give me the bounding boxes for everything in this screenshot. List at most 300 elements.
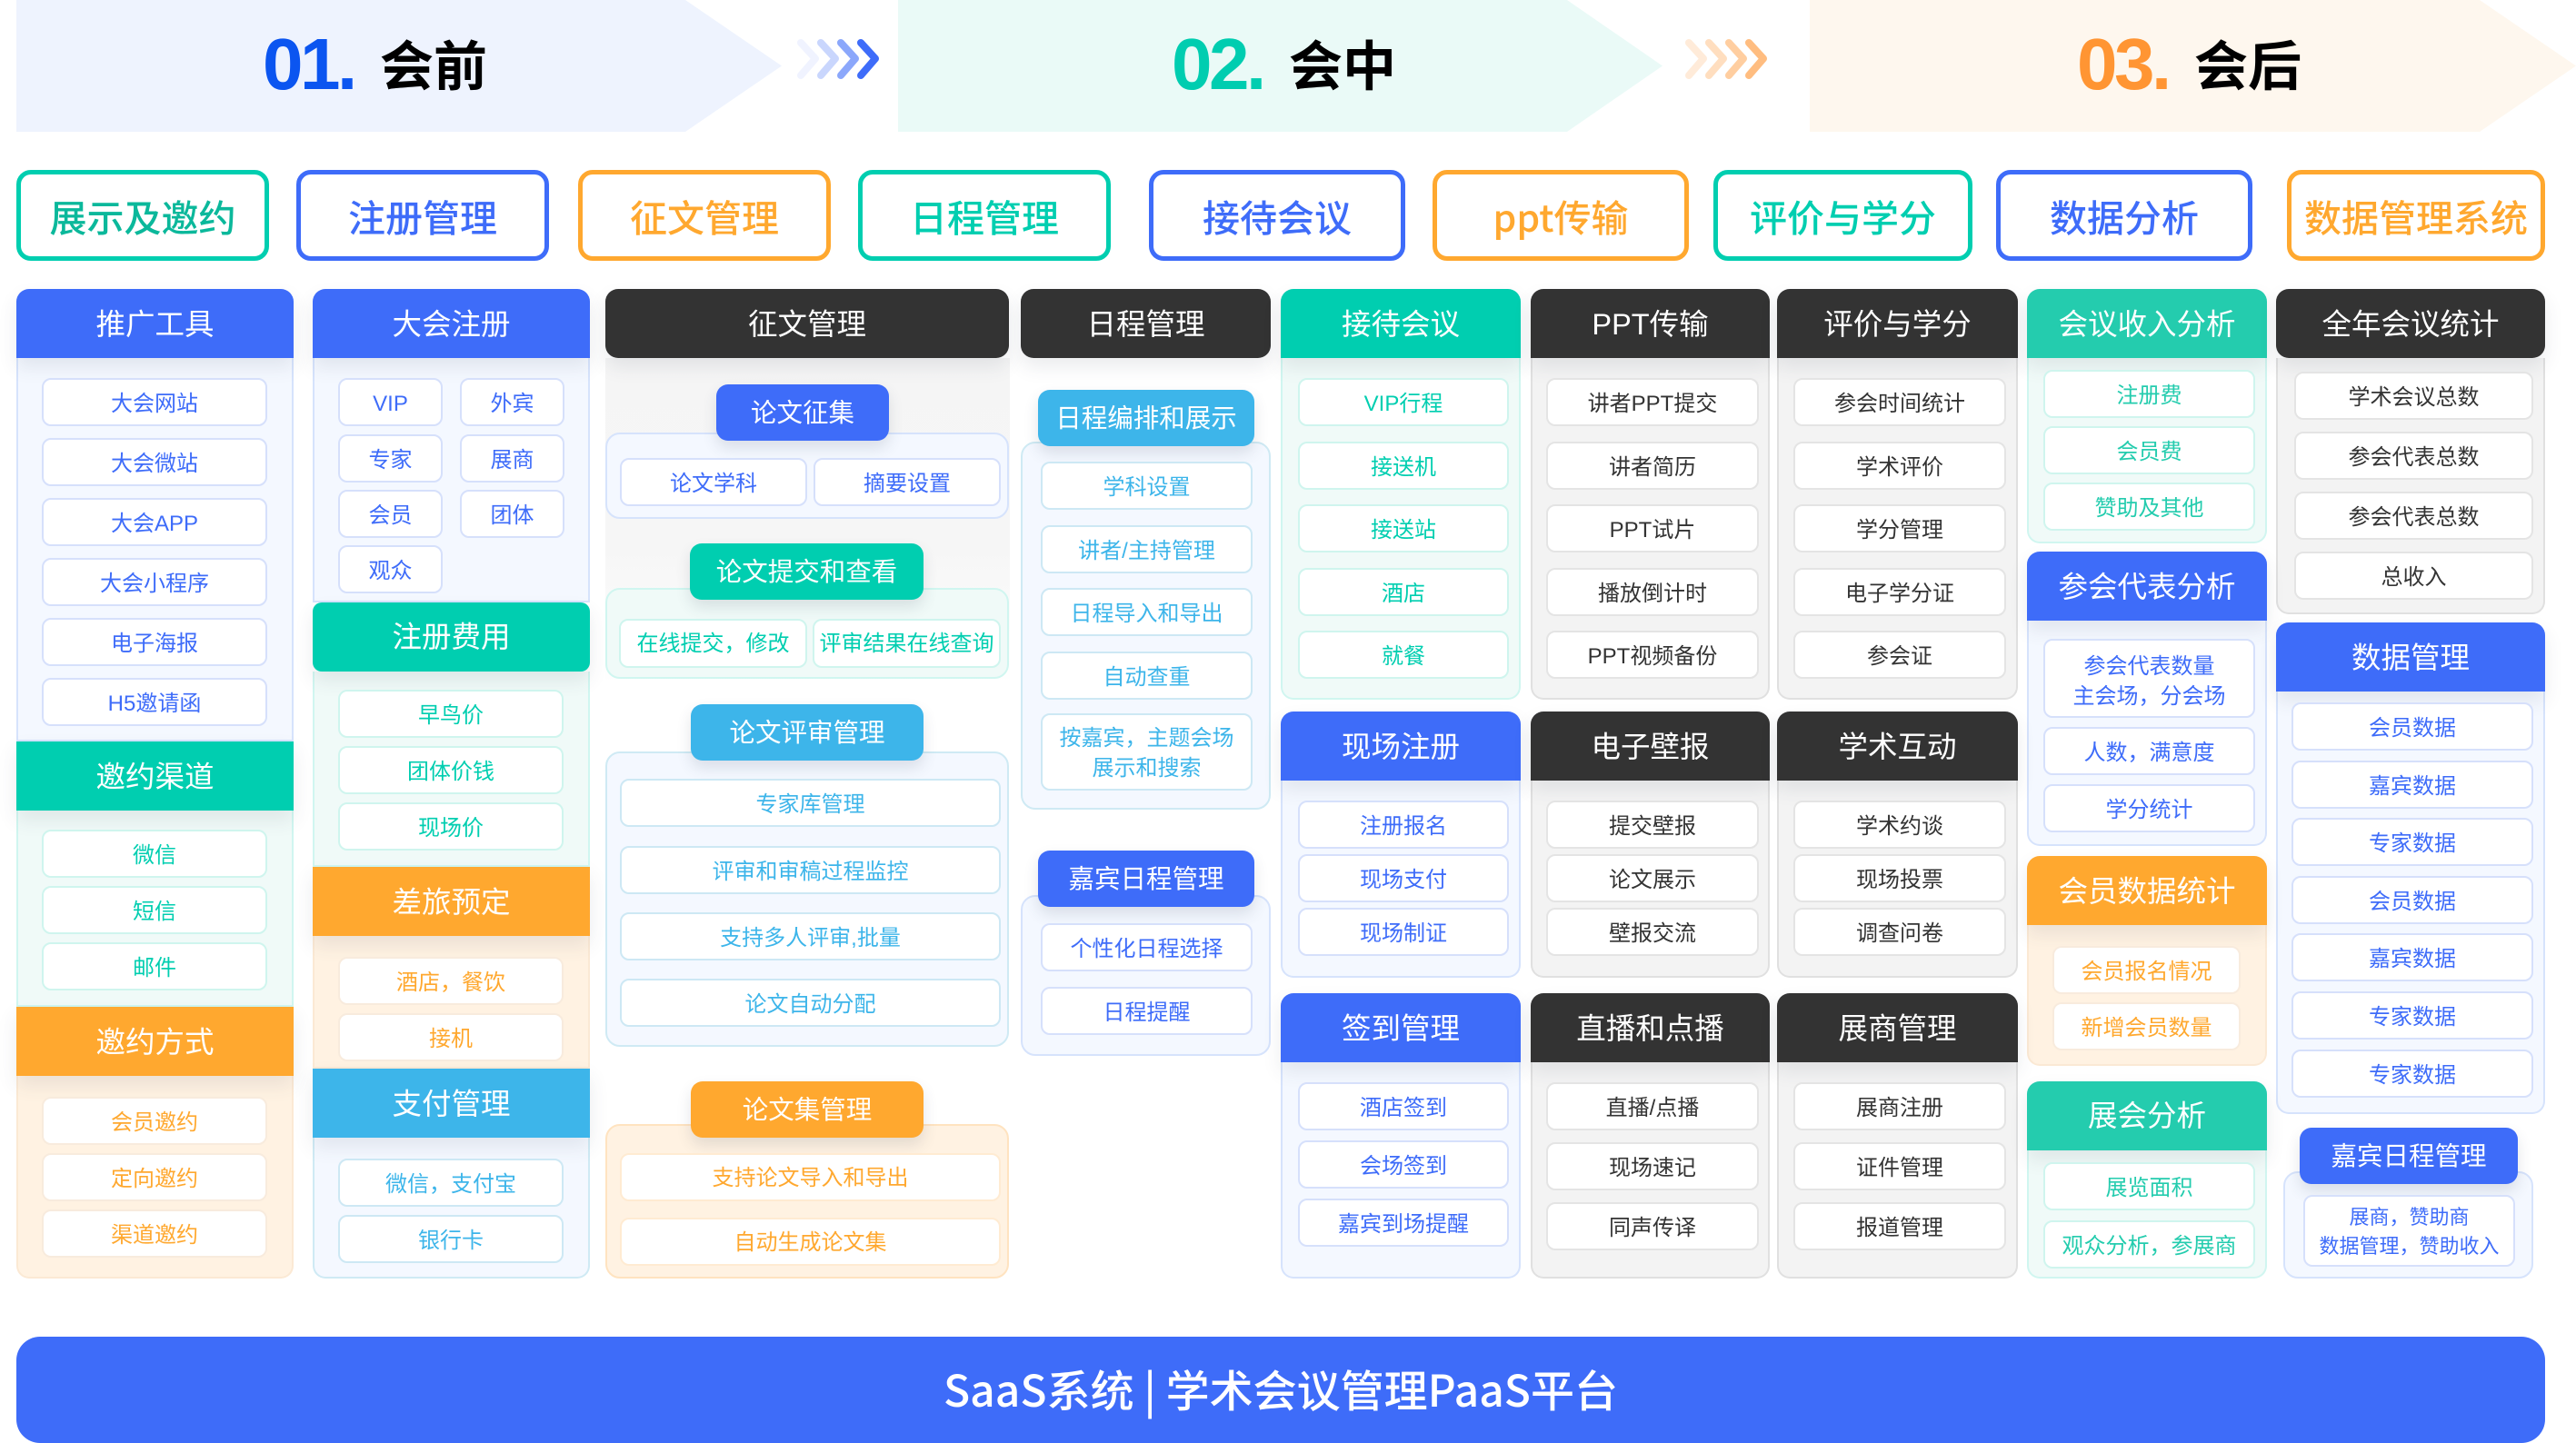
item: 证件管理: 证件管理 bbox=[1856, 1156, 1943, 1179]
item: 会员数据: 会员数据 bbox=[2369, 716, 2456, 740]
item: 注册报名 bbox=[1298, 801, 1509, 849]
panel body bbox=[1531, 1062, 1770, 1279]
header: 学术互动: 学术互动 bbox=[1838, 731, 1956, 763]
item: 自动查重 bbox=[1041, 652, 1253, 700]
header: 数据管理 bbox=[2276, 622, 2545, 692]
item: 定向邀约: 定向邀约 bbox=[111, 1167, 198, 1190]
item: 调查问卷: 调查问卷 bbox=[1856, 921, 1943, 945]
item: 外宾 bbox=[460, 378, 564, 426]
item: 微信 bbox=[42, 830, 267, 878]
item: 专家数据: 专家数据 bbox=[2369, 1063, 2456, 1087]
item: 邮件 bbox=[42, 942, 267, 990]
pill: 论文集管理 bbox=[691, 1081, 924, 1138]
item: 参会代表总数: 参会代表总数 bbox=[2349, 505, 2480, 529]
item: 现场速记: 现场速记 bbox=[1609, 1156, 1696, 1179]
item: 观众分析，参展商 bbox=[2043, 1220, 2255, 1269]
item: 支持多人评审,批量 bbox=[620, 912, 1001, 960]
tab: 数据管理系统: 数据管理系统 bbox=[2304, 188, 2528, 243]
header: 全年会议统计: 全年会议统计 bbox=[2321, 307, 2500, 340]
tab: 注册管理: 注册管理 bbox=[348, 188, 497, 243]
item: 早鸟价: 早鸟价 bbox=[418, 703, 484, 727]
item: 短信: 短信 bbox=[133, 900, 176, 923]
panel: 会议收入分析 bbox=[2025, 289, 2269, 543]
header: 差旅预定: 差旅预定 bbox=[392, 885, 511, 918]
panel body bbox=[313, 936, 590, 1069]
tab: 征文管理: 征文管理 bbox=[630, 188, 779, 243]
number 01: 01. bbox=[263, 24, 354, 104]
item: PPT试片: PPT试片 bbox=[1610, 518, 1695, 542]
pill: 日程编排和展示: 日程编排和展示 bbox=[1055, 404, 1237, 433]
item: 日程导入和导出: 日程导入和导出 bbox=[1071, 602, 1223, 625]
item: 会场签到: 会场签到 bbox=[1360, 1154, 1447, 1178]
item: 邮件: 邮件 bbox=[133, 956, 176, 980]
header: 会员数据统计: 会员数据统计 bbox=[2058, 874, 2236, 907]
item: 酒店: 酒店 bbox=[1382, 582, 1425, 605]
item: 专家数据 bbox=[2291, 818, 2533, 866]
group panel bbox=[1021, 442, 1271, 810]
item: 团体: 团体 bbox=[491, 503, 534, 527]
item: 个性化日程选择 bbox=[1041, 923, 1253, 971]
tab: 接待会议: 接待会议 bbox=[1203, 188, 1352, 243]
item: 会员数据 bbox=[2291, 876, 2533, 924]
item: 新增会员数量: 新增会员数量 bbox=[2082, 1016, 2212, 1040]
panel body bbox=[2027, 621, 2267, 846]
item: 自动生成论文集: 自动生成论文集 bbox=[734, 1230, 887, 1254]
item: 接送站 bbox=[1298, 504, 1509, 552]
item: 现场制证: 现场制证 bbox=[1360, 921, 1447, 945]
pill: 嘉宾日程管理 bbox=[1038, 851, 1254, 907]
item: 学分管理 bbox=[1793, 504, 2006, 552]
group panel bbox=[1021, 895, 1271, 1056]
item: 现场投票 bbox=[1793, 854, 2006, 902]
group panel bbox=[605, 751, 1009, 1047]
item: 摘要设置 bbox=[814, 458, 1001, 506]
item: 学分统计 bbox=[2043, 784, 2255, 832]
item: 会员数据 bbox=[2291, 702, 2533, 751]
item: 学科设置 bbox=[1041, 462, 1253, 510]
header: 征文管理: 征文管理 bbox=[748, 307, 866, 340]
panel: 参会代表分析 bbox=[2025, 552, 2269, 846]
item: 微信，支付宝 bbox=[338, 1159, 564, 1207]
pill: 嘉宾日程管理 bbox=[2300, 1128, 2518, 1184]
number 03: 03. bbox=[2077, 24, 2169, 104]
item: 讲者/主持管理: 讲者/主持管理 bbox=[1078, 538, 1215, 563]
item: 讲者简历 bbox=[1546, 442, 1759, 490]
panel: 签到管理 bbox=[1279, 993, 1523, 1279]
header: 邀约方式 bbox=[16, 1007, 294, 1076]
item: 调查问卷 bbox=[1793, 908, 2006, 956]
item: 论文学科 bbox=[620, 458, 807, 506]
item: 论文自动分配 bbox=[620, 979, 1001, 1027]
banner: 03 after the meeting bbox=[1810, 0, 2576, 132]
group: 嘉宾日程管理 bbox=[1021, 851, 1271, 1056]
item: 大会APP bbox=[42, 498, 267, 546]
item: 在线提交，修改: 在线提交，修改 bbox=[636, 631, 789, 656]
item: 学分统计: 学分统计 bbox=[2105, 798, 2192, 821]
item: 新增会员数量 bbox=[2052, 1002, 2241, 1050]
group panel bbox=[2283, 1171, 2533, 1279]
item: 现场制证 bbox=[1298, 908, 1509, 956]
panel body bbox=[16, 358, 294, 741]
item: 参会代表总数 bbox=[2294, 432, 2533, 480]
item: 讲者/主持管理 bbox=[1041, 525, 1253, 573]
number 02: 02. bbox=[1172, 24, 1263, 104]
panel body bbox=[2027, 925, 2267, 1066]
item: 论文展示: 论文展示 bbox=[1609, 867, 1696, 892]
item: 专家 bbox=[338, 434, 443, 483]
item: 专家数据: 专家数据 bbox=[2369, 831, 2456, 856]
item: 定向邀约 bbox=[42, 1153, 267, 1201]
panel: 展商管理 bbox=[1775, 993, 2020, 1279]
header: 会员数据统计 bbox=[2027, 856, 2267, 925]
item: 微信，支付宝: 微信，支付宝 bbox=[385, 1172, 516, 1196]
item: 参会代表数量 主会场，分会场: 主会场，分会场 bbox=[2072, 683, 2225, 709]
item: 展商: 展商 bbox=[491, 447, 534, 473]
pill: 嘉宾日程管理: 嘉宾日程管理 bbox=[2331, 1142, 2487, 1171]
item: 嘉宾数据: 嘉宾数据 bbox=[2369, 947, 2456, 970]
item: 大会APP: 大会APP bbox=[111, 511, 198, 536]
panel: 邀约方式 bbox=[15, 1007, 295, 1279]
header: 支付管理: 支付管理 bbox=[392, 1087, 511, 1120]
item: 学术约谈: 学术约谈 bbox=[1856, 814, 1943, 838]
panel: 全年会议统计 bbox=[2274, 289, 2547, 614]
header: 评价与学分 bbox=[1777, 289, 2018, 358]
item: 会员报名情况: 会员报名情况 bbox=[2082, 960, 2212, 983]
panel body bbox=[313, 358, 590, 602]
item: 展商注册 bbox=[1793, 1082, 2006, 1130]
item: 总收入 bbox=[2294, 552, 2533, 600]
item: 嘉宾到场提醒 bbox=[1298, 1199, 1509, 1247]
panel: 评价与学分 bbox=[1775, 289, 2020, 700]
panel: 差旅预定 bbox=[311, 867, 592, 1069]
banner: 01 before the meeting bbox=[16, 0, 782, 132]
item: H5邀请函 bbox=[42, 678, 267, 726]
item: 日程提醒: 日程提醒 bbox=[1103, 1000, 1191, 1025]
pill: 论文提交和查看: 论文提交和查看 bbox=[716, 558, 897, 587]
item: 论文展示 bbox=[1546, 854, 1759, 902]
item: 参会时间统计: 参会时间统计 bbox=[1834, 391, 1965, 416]
item: 评审和审稿过程监控 bbox=[620, 846, 1001, 894]
item: 按嘉宾，主题会场展示和搜索: 展示和搜索 bbox=[1093, 756, 1202, 781]
header: 电子壁报: 电子壁报 bbox=[1591, 731, 1709, 763]
item: 外宾: 外宾 bbox=[491, 391, 534, 416]
item: 观众分析，参展商: 观众分析，参展商 bbox=[2062, 1234, 2236, 1258]
panel body bbox=[1281, 781, 1521, 978]
item: 报道管理 bbox=[1793, 1202, 2006, 1250]
tab: 接待会议 bbox=[1149, 170, 1405, 261]
header: 展会分析: 展会分析 bbox=[2088, 1100, 2206, 1132]
heading: 会前: 会前 bbox=[380, 24, 487, 101]
item: 嘉宾数据 bbox=[2291, 933, 2533, 981]
item: 播放倒计时: 播放倒计时 bbox=[1598, 582, 1707, 605]
item: 观众 bbox=[338, 545, 443, 593]
item: 渠道邀约 bbox=[42, 1209, 267, 1258]
tab: 征文管理 bbox=[578, 170, 831, 261]
header: 展商管理 bbox=[1777, 993, 2018, 1062]
item: 专家: 专家 bbox=[369, 447, 413, 473]
item: 按嘉宾，主题会场展示和搜索 bbox=[1041, 713, 1253, 791]
heading: 会中: 会中 bbox=[1289, 24, 1396, 101]
pill: 论文评审管理 bbox=[691, 704, 924, 761]
item: 大会网站: 大会网站 bbox=[111, 391, 198, 416]
header: 注册费用 bbox=[313, 602, 590, 672]
group panel bbox=[605, 1124, 1009, 1279]
panel body bbox=[1777, 781, 2018, 978]
panel body bbox=[16, 811, 294, 1007]
pill: 论文评审管理: 论文评审管理 bbox=[729, 719, 885, 748]
item: 接送机 bbox=[1298, 442, 1509, 490]
item: 赞助及其他 bbox=[2043, 483, 2255, 531]
pill: 论文征集: 论文征集 bbox=[751, 399, 854, 428]
item: 学分管理: 学分管理 bbox=[1856, 518, 1943, 542]
item: 电子学分证: 电子学分证 bbox=[1845, 582, 1954, 605]
item: 同声传译 bbox=[1546, 1202, 1759, 1250]
panel body bbox=[1281, 1062, 1521, 1279]
panel body bbox=[1531, 358, 1770, 700]
panel: 注册费用 bbox=[311, 602, 592, 867]
header: 现场注册 bbox=[1281, 712, 1521, 781]
item: 提交壁报 bbox=[1546, 801, 1759, 849]
item: 大会微站: 大会微站 bbox=[111, 451, 198, 476]
panel: 直播和点播 bbox=[1529, 993, 1772, 1279]
item: 报道管理: 报道管理 bbox=[1856, 1216, 1943, 1239]
item: 人数，满意度 bbox=[2043, 727, 2255, 775]
item: 讲者PPT提交: 讲者PPT提交 bbox=[1588, 391, 1717, 416]
panel: 会员数据统计 bbox=[2025, 856, 2269, 1066]
item: 论文学科: 论文学科 bbox=[670, 471, 757, 496]
panel: 学术互动 bbox=[1775, 712, 2020, 978]
item: H5邀请函: H5邀请函 bbox=[108, 691, 201, 716]
item: VIP bbox=[338, 378, 443, 426]
item: 专家库管理 bbox=[620, 779, 1001, 827]
item: 团体价钱: 团体价钱 bbox=[407, 760, 494, 783]
group: 论文集管理 bbox=[605, 1081, 1009, 1279]
item: 接机: 接机 bbox=[429, 1027, 473, 1050]
item: 自动生成论文集 bbox=[620, 1218, 1001, 1266]
item: 就餐 bbox=[1298, 631, 1509, 679]
panel: 数据管理 bbox=[2274, 622, 2547, 1114]
panel: 推广工具 bbox=[15, 289, 295, 741]
panel body bbox=[313, 1138, 590, 1279]
item: 日程提醒 bbox=[1041, 987, 1253, 1035]
item: 会员报名情况 bbox=[2052, 946, 2241, 994]
panel body bbox=[1281, 358, 1521, 700]
header: 大会注册 bbox=[313, 289, 590, 358]
panel body bbox=[2276, 358, 2545, 614]
tab: 日程管理 bbox=[858, 170, 1111, 261]
item: 专家数据 bbox=[2291, 991, 2533, 1040]
header: PPT传输 bbox=[1531, 289, 1770, 358]
group: 论文评审管理 bbox=[605, 704, 1009, 1047]
item: 学术会议总数 bbox=[2294, 372, 2533, 420]
item: 壁报交流 bbox=[1546, 908, 1759, 956]
item: 现场价 bbox=[338, 802, 564, 851]
arrow: blue chevrons bbox=[797, 39, 879, 79]
tab: 日程管理: 日程管理 bbox=[910, 188, 1059, 243]
header: 邀约渠道: 邀约渠道 bbox=[95, 760, 215, 792]
item: 直播/点播 bbox=[1546, 1082, 1759, 1130]
panel: 电子壁报 bbox=[1529, 712, 1772, 978]
pill: 日程编排和展示 bbox=[1038, 390, 1254, 446]
item: 参会代表数量 主会场，分会场: 参会代表数量 bbox=[2083, 654, 2214, 678]
item: PPT试片 bbox=[1546, 504, 1759, 552]
header: 邀约方式: 邀约方式 bbox=[95, 1025, 215, 1058]
item: 论文自动分配: 论文自动分配 bbox=[745, 992, 876, 1016]
group panel bbox=[605, 433, 1009, 519]
item: 个性化日程选择: 个性化日程选择 bbox=[1071, 936, 1223, 961]
panel body bbox=[2027, 1150, 2267, 1279]
item: 酒店，餐饮 bbox=[338, 957, 564, 1005]
item: 就餐: 就餐 bbox=[1382, 643, 1425, 669]
item: 会员 bbox=[338, 490, 443, 538]
item: 讲者PPT提交 bbox=[1546, 378, 1759, 426]
item: 人数，满意度: 人数，满意度 bbox=[2083, 740, 2214, 765]
item: 微信: 微信 bbox=[133, 843, 176, 867]
column background: 征文管理 bbox=[605, 358, 1010, 685]
panel body bbox=[313, 672, 590, 867]
item: 注册报名: 注册报名 bbox=[1360, 814, 1447, 838]
item: 参会代表总数: 参会代表总数 bbox=[2349, 445, 2480, 469]
item: 学科设置: 学科设置 bbox=[1103, 474, 1191, 500]
panel: 展会分析 bbox=[2025, 1081, 2269, 1279]
group panel bbox=[605, 588, 1009, 679]
item: 酒店，餐饮: 酒店，餐饮 bbox=[396, 970, 505, 994]
item: 现场支付 bbox=[1298, 854, 1509, 902]
pill: 论文征集 bbox=[716, 384, 889, 441]
tab: 数据分析: 数据分析 bbox=[2050, 188, 2199, 243]
tab: ppt传输 bbox=[1433, 170, 1689, 261]
item: 展商 bbox=[460, 434, 564, 483]
item: 学术会议总数: 学术会议总数 bbox=[2349, 385, 2480, 409]
item: 支持论文导入和导出: 支持论文导入和导出 bbox=[713, 1165, 909, 1190]
group: 论文征集 bbox=[605, 384, 1009, 519]
item: 日程导入和导出 bbox=[1041, 588, 1253, 636]
tab: 注册管理 bbox=[296, 170, 549, 261]
item: 电子海报: 电子海报 bbox=[111, 631, 198, 656]
item: 展商注册: 展商注册 bbox=[1856, 1096, 1943, 1120]
item: 壁报交流: 壁报交流 bbox=[1609, 921, 1696, 945]
item: 参会证: 参会证 bbox=[1867, 643, 1932, 669]
pill: 论文提交和查看 bbox=[690, 543, 924, 600]
panel: 接待会议 bbox=[1279, 289, 1523, 700]
header: 评价与学分: 评价与学分 bbox=[1823, 307, 1972, 340]
item: 会员邀约: 会员邀约 bbox=[111, 1110, 198, 1134]
arrow: orange chevrons bbox=[1685, 39, 1767, 79]
footer bar: platform title bbox=[16, 1337, 2545, 1443]
item: 参会时间统计 bbox=[1793, 378, 2006, 426]
item: 注册费 bbox=[2043, 370, 2255, 418]
item: 早鸟价 bbox=[338, 690, 564, 738]
header: 现场注册: 现场注册 bbox=[1342, 731, 1460, 763]
footer bar: platform title: SaaS系统 | 学术会议管理PaaS平台 bbox=[944, 1356, 1618, 1419]
item: 展览面积: 展览面积 bbox=[2105, 1176, 2192, 1199]
item: PPT视频备份 bbox=[1546, 631, 1759, 679]
item: 现场速记 bbox=[1546, 1142, 1759, 1190]
panel: 邀约渠道 bbox=[15, 741, 295, 1007]
header: 注册费用: 注册费用 bbox=[392, 620, 511, 652]
item: 在线提交，修改 bbox=[619, 619, 807, 668]
item: 专家数据 bbox=[2291, 1050, 2533, 1098]
pill: 嘉宾日程管理: 嘉宾日程管理 bbox=[1068, 865, 1223, 894]
header: 签到管理: 签到管理 bbox=[1342, 1012, 1460, 1045]
tab: ppt传输: ppt传输 bbox=[1493, 188, 1628, 243]
item: 会员费 bbox=[2043, 426, 2255, 474]
heading: 会后: 会后 bbox=[2194, 24, 2301, 101]
item: 参会代表数量 主会场，分会场 bbox=[2043, 639, 2255, 718]
item: 摘要设置: 摘要设置 bbox=[864, 471, 951, 496]
item: 提交壁报: 提交壁报 bbox=[1609, 814, 1696, 838]
item: 嘉宾数据 bbox=[2291, 761, 2533, 809]
panel body bbox=[2276, 692, 2545, 1114]
item: 同声传译: 同声传译 bbox=[1609, 1216, 1696, 1239]
item: 现场投票: 现场投票 bbox=[1856, 867, 1943, 892]
item: 银行卡 bbox=[338, 1215, 564, 1263]
header: 直播和点播 bbox=[1531, 993, 1770, 1062]
header: 日程管理: 日程管理 bbox=[1086, 307, 1205, 340]
item: 接送站: 接送站 bbox=[1371, 518, 1436, 542]
item: 直播/点播: 直播/点播 bbox=[1606, 1096, 1699, 1120]
tab: 数据分析 bbox=[1996, 170, 2252, 261]
header: 支付管理 bbox=[313, 1069, 590, 1138]
header: 会议收入分析: 会议收入分析 bbox=[2058, 307, 2236, 340]
item: 现场支付: 现场支付 bbox=[1360, 867, 1447, 892]
item: 酒店签到: 酒店签到 bbox=[1360, 1096, 1447, 1120]
item: 学术约谈 bbox=[1793, 801, 2006, 849]
item: 学术评价 bbox=[1793, 442, 2006, 490]
item: PPT视频备份: PPT视频备份 bbox=[1588, 643, 1717, 669]
item: 展商，赞助商 数据管理，赞助收入: 数据管理，赞助收入 bbox=[2319, 1235, 2500, 1258]
item: 参会证 bbox=[1793, 631, 2006, 679]
header: 参会代表分析: 参会代表分析 bbox=[2058, 571, 2236, 603]
item: 自动查重: 自动查重 bbox=[1103, 665, 1191, 689]
header: 全年会议统计 bbox=[2276, 289, 2545, 358]
panel body bbox=[2027, 358, 2267, 543]
tab: 评价与学分: 评价与学分 bbox=[1750, 188, 1936, 243]
tab: 数据管理系统 bbox=[2287, 170, 2545, 261]
panel: PPT传输 bbox=[1529, 289, 1772, 700]
item: VIP行程 bbox=[1298, 378, 1509, 426]
item: 大会微站 bbox=[42, 438, 267, 486]
item: 学术评价: 学术评价 bbox=[1856, 454, 1943, 480]
group: 论文提交和查看 bbox=[605, 543, 1009, 679]
panel body bbox=[1777, 358, 2018, 700]
item: 会员: 会员 bbox=[369, 503, 413, 527]
item: 参会代表总数 bbox=[2294, 492, 2533, 540]
header: 直播和点播: 直播和点播 bbox=[1576, 1012, 1724, 1045]
item: 接机 bbox=[338, 1013, 564, 1061]
item: 支持论文导入和导出 bbox=[620, 1153, 1001, 1201]
header: PPT传输: PPT传输 bbox=[1592, 307, 1709, 340]
header: 大会注册: 大会注册 bbox=[392, 307, 511, 340]
item: 会场签到 bbox=[1298, 1140, 1509, 1189]
item: 总收入: 总收入 bbox=[2381, 565, 2447, 589]
item: 现场价: 现场价 bbox=[418, 816, 484, 840]
item: 证件管理 bbox=[1793, 1142, 2006, 1190]
header: 会议收入分析 bbox=[2027, 289, 2267, 358]
item: 银行卡: 银行卡 bbox=[418, 1229, 484, 1252]
header: 展商管理: 展商管理 bbox=[1838, 1012, 1956, 1045]
header: 数据管理: 数据管理 bbox=[2351, 642, 2470, 674]
item: 专家库管理: 专家库管理 bbox=[756, 792, 865, 816]
item: 接送机: 接送机 bbox=[1371, 454, 1436, 480]
item: 大会网站 bbox=[42, 378, 267, 426]
item: 酒店 bbox=[1298, 568, 1509, 616]
item: 短信 bbox=[42, 886, 267, 934]
item: 讲者简历: 讲者简历 bbox=[1609, 454, 1696, 480]
header: 推广工具 bbox=[16, 289, 294, 358]
item: 观众: 观众 bbox=[369, 558, 413, 583]
item: 电子学分证 bbox=[1793, 568, 2006, 616]
